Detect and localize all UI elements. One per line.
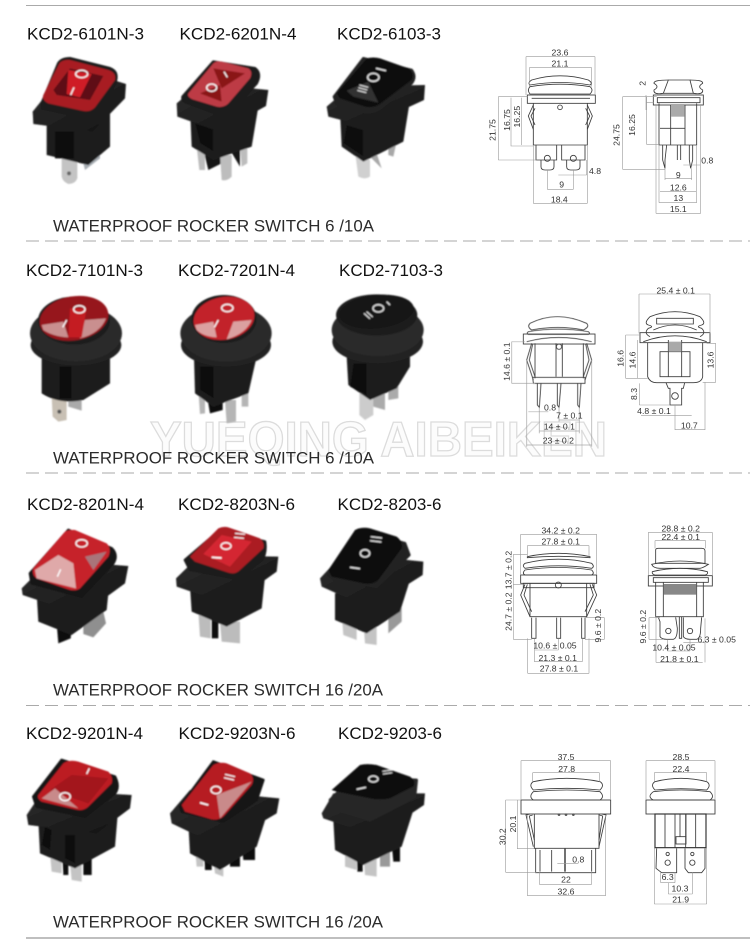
side view: 21.8 ± 0.1 [660, 654, 699, 664]
side view [646, 752, 715, 905]
front view: 21.1 [552, 59, 569, 69]
row 3 switch photos [22, 527, 423, 645]
switch KCD2-6201N-4 [177, 61, 268, 180]
front view: 32.6 [558, 886, 575, 896]
side view: 6.3 ± 0.05 [697, 635, 736, 645]
front view: 14.6 ± 0.1 [502, 342, 512, 381]
side view: 0.8 [701, 155, 714, 165]
side view: 22.4 ± 0.1 [661, 532, 700, 542]
side view: 21.9 [672, 895, 689, 905]
front view: 16.25 [512, 106, 522, 128]
row 3 model labels: KCD2-8203-6 [338, 495, 442, 514]
front view: 27.8 ± 0.1 [541, 537, 580, 547]
switch KCD2-8203N-6 [176, 527, 278, 643]
front view: 9 [559, 179, 564, 189]
front view: 22 [561, 875, 571, 885]
row 1 model labels: KCD2-6101N-3 [27, 24, 144, 44]
row 1 model labels: KCD2-6201N-4 [180, 24, 296, 44]
row 4 model labels [26, 724, 442, 743]
switch KCD2-6101N-3 [33, 58, 126, 184]
side view: 14.6 [627, 351, 637, 368]
front view: 9.6 ± 0.2 [593, 609, 603, 642]
front view: 14 ± 0.1 [544, 421, 575, 431]
switch KCD2-9203-6 [322, 764, 425, 877]
side view [612, 80, 714, 214]
side view: 24.75 [612, 124, 622, 146]
front view [497, 752, 611, 896]
side view: 4.8 ± 0.1 [637, 406, 671, 416]
side view: 16.25 [627, 114, 637, 136]
row 2 model labels: KCD2-7201N-4 [178, 261, 295, 280]
side view: 9 [676, 170, 681, 180]
front view: 27.8 [558, 764, 575, 774]
side view: 10.4 ± 0.05 [652, 642, 696, 652]
row 2 technical drawing [502, 285, 716, 447]
row 1 caption: WATERPROOF ROCKER SWITCH 6 /10A [53, 216, 375, 236]
side view: 10.7 [681, 420, 698, 430]
side view: 13 [674, 193, 683, 203]
switch KCD2-6103-3 [327, 57, 425, 178]
front view: 20.1 [508, 815, 518, 832]
front view: 10.6 ± 0.05 [533, 641, 577, 651]
side view: 9.6 ± 0.2 [638, 610, 648, 643]
row 2 caption: WATERPROOF ROCKER SWITCH 6 /10A [53, 448, 375, 468]
front view [502, 317, 595, 447]
front view: 21.3 ± 0.1 [538, 653, 577, 663]
switch KCD2-9201N-4 [27, 760, 132, 882]
row 4 technical drawing [497, 752, 715, 905]
front view [488, 47, 601, 204]
row 2 model labels: KCD2-7101N-3 [26, 261, 143, 280]
side view: 22.4 [673, 764, 690, 774]
side view: 8.3 [629, 388, 639, 400]
switch KCD2-8203-6 [320, 528, 423, 645]
side view: 13.6 [706, 351, 716, 368]
row 4 model labels: KCD2-9201N-4 [26, 724, 143, 743]
side view [616, 285, 716, 430]
side view: 28.8 ± 0.2 [661, 524, 700, 534]
switch KCD2-9203N-6 [170, 762, 279, 877]
row 1 switch photos [33, 57, 425, 184]
front view: 23.6 [552, 47, 569, 57]
row 4 model labels: KCD2-9203N-6 [178, 724, 296, 743]
row 1 technical drawing [488, 47, 714, 214]
row 3 technical drawing [504, 524, 736, 674]
row 1 model labels [27, 24, 441, 44]
row 3 model labels [27, 495, 442, 514]
front view: 23 ± 0.2 [543, 435, 574, 445]
front view: 27.8 ± 0.1 [540, 664, 578, 674]
row 4 model labels: KCD2-9203-6 [338, 724, 442, 743]
front view: 7 ± 0.1 [556, 411, 583, 421]
front view: 30.2 [497, 828, 507, 845]
row 1 model labels: KCD2-6103-3 [337, 24, 441, 44]
front view: 13.7 ± 0.2 [504, 551, 514, 589]
side view: 2 [637, 81, 647, 86]
front view: 18.4 [551, 194, 568, 204]
front view: 0.8 [544, 403, 556, 413]
front view: 34.2 ± 0.2 [541, 526, 580, 536]
side view: 28.5 [673, 752, 690, 762]
switch KCD2-7101N-3 [30, 291, 122, 422]
switch KCD2-8201N-4 [22, 530, 128, 643]
row 3 caption: WATERPROOF ROCKER SWITCH 16 /20A [53, 680, 384, 700]
side view: 6.3 [662, 872, 674, 882]
front view: 4.8 [589, 166, 601, 176]
side view: 15.1 [670, 204, 687, 214]
row 3 model labels: KCD2-8201N-4 [27, 495, 144, 514]
row 2 model labels: KCD2-7103-3 [339, 261, 443, 280]
side view: 16.6 [616, 350, 626, 367]
row 4 caption: WATERPROOF ROCKER SWITCH 16 /20A [53, 912, 384, 932]
row 4 switch photos [27, 760, 425, 882]
front view [504, 526, 604, 674]
front view: 24.7 ± 0.2 [504, 592, 514, 631]
row 3 model labels: KCD2-8203N-6 [178, 495, 295, 514]
front view: 37.5 [558, 752, 575, 762]
watermark: YUEQING AIBEIKEN [150, 413, 607, 467]
row 2 model labels [26, 261, 443, 280]
switch KCD2-7201N-4 [180, 292, 272, 423]
row 2 switch photos [30, 291, 424, 423]
front view: 21.75 [488, 119, 498, 141]
side view: 25.4 ± 0.1 [656, 285, 695, 295]
front view: 16.75 [502, 109, 512, 131]
side view [638, 524, 736, 664]
front view: 0.8 [572, 855, 585, 865]
side view: 10.3 [672, 883, 689, 893]
switch KCD2-7103-3 [332, 291, 424, 420]
side view: 12.6 [670, 182, 687, 192]
